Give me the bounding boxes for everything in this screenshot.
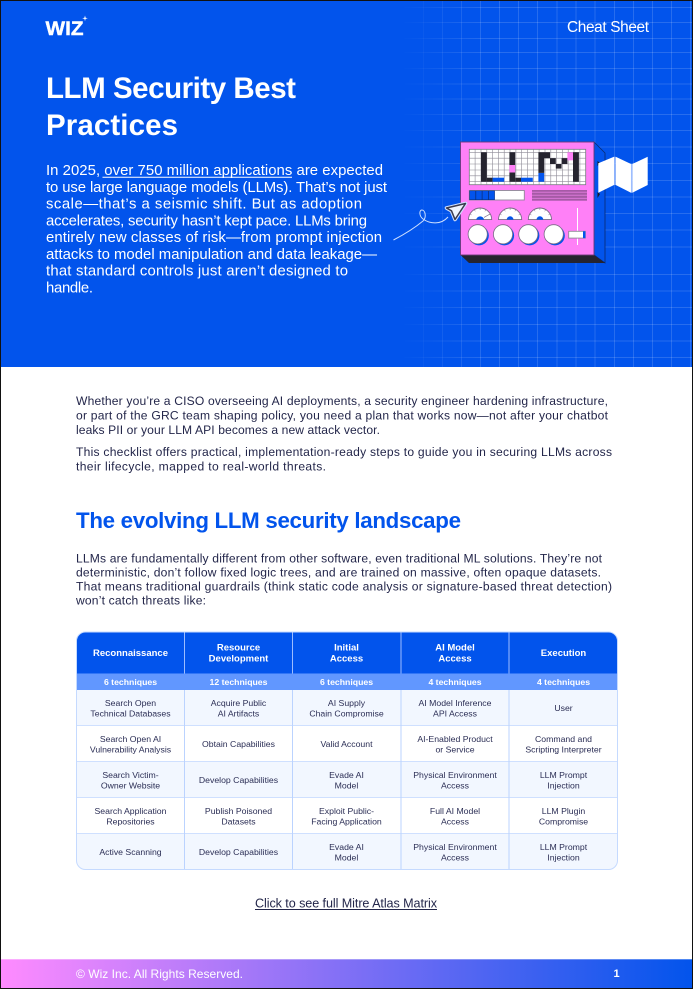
table row 1: AI Supply	[328, 698, 366, 708]
icon: folded map	[598, 157, 648, 193]
technique count row: 4 techniques	[537, 677, 590, 687]
table row 4	[95, 806, 588, 826]
table: MITRE ATLAS techniques	[76, 632, 618, 870]
footer bar: © Wiz Inc. All Rights Reserved.	[76, 967, 243, 981]
table row 4: Repositories	[106, 816, 155, 826]
intro text block: Whether you’re a CISO overseeing AI deployments, a security engineer hardening infrastructure,	[76, 394, 608, 408]
hero background panel	[0, 0, 693, 367]
table row 1: Search Open	[105, 698, 156, 708]
table row 3: Injection	[547, 780, 580, 790]
table row 3: Owner Website	[101, 780, 160, 790]
section paragraph: won’t catch threats like:	[75, 594, 206, 608]
striped readout	[532, 190, 587, 201]
table row 4: Facing Application	[311, 816, 382, 826]
table header row: Reconnaissance	[93, 648, 168, 659]
table row 2: AI-Enabled Product	[417, 734, 493, 744]
technique count row	[104, 677, 590, 687]
knobs	[468, 225, 565, 245]
hero intro paragraph: attacks to model manipulation and data leakage—	[46, 247, 377, 263]
slider	[569, 208, 585, 245]
table row 5: Access	[441, 852, 470, 862]
table row 4: LLM Plugin	[542, 806, 585, 816]
hero intro paragraph: that standard controls just aren’t designed to	[46, 264, 348, 280]
hero intro paragraph: scale—that’s a seismic shift. But as adoption	[46, 196, 362, 212]
table row 1: AI Artifacts	[218, 708, 260, 718]
table row 1: Acquire Public	[211, 698, 267, 708]
table header row: Access	[438, 654, 472, 664]
table row 4: Exploit Public-	[319, 806, 374, 816]
table row 4: Compromise	[539, 816, 588, 826]
table row 3: Evade AI	[329, 770, 364, 780]
intro text block: This checklist offers practical, implementation-ready steps to guide you in securing LLMs across	[76, 445, 612, 459]
table row 2: Command and	[535, 734, 592, 744]
table row 4: Access	[441, 816, 470, 826]
technique count row: 4 techniques	[428, 677, 482, 687]
technique count row: 6 techniques	[104, 677, 157, 687]
illustration: LLM control panel	[394, 142, 648, 263]
technique count row: 12 techniques	[210, 677, 268, 687]
intro text block: their lifecycle, mapped to real-world threats.	[76, 460, 326, 474]
title	[46, 72, 296, 142]
label: Cheat Sheet: Cheat Sheet	[567, 19, 650, 36]
intro text block: or part of the GRC team shaping policy, you need a plan that works now—not after your chatbot	[76, 408, 609, 422]
table row 3: LLM Prompt	[540, 770, 588, 780]
table row 4: Full AI Model	[430, 806, 480, 816]
gauges	[468, 208, 552, 220]
hero intro paragraph: handle.	[46, 280, 93, 296]
hero intro paragraph: accelerates, security hasn’t kept pace. LLMs bring	[46, 213, 367, 229]
table row 4: Publish Poisoned	[205, 806, 272, 816]
table row 5: Evade AI	[329, 842, 364, 852]
intro text block: leaks PII or your LLM API becomes a new attack vector.	[76, 423, 380, 437]
intro text block	[76, 394, 612, 474]
logo: WIZ: WIZ	[46, 18, 84, 40]
table row 3: Physical Environment	[413, 770, 497, 780]
table header row: Execution	[541, 648, 586, 659]
table row 1: API Access	[433, 708, 478, 718]
footer bar	[0, 959, 693, 988]
table row 3: Develop Capabilities	[199, 775, 279, 785]
panel side and base	[460, 142, 605, 263]
table row 5: Injection	[547, 852, 580, 862]
pixel screen reading LLM	[469, 149, 586, 185]
table row 5: Physical Environment	[413, 842, 497, 852]
table row 1: AI Model Inference	[419, 698, 492, 708]
table row 4: Datasets	[221, 816, 256, 826]
table row 5: LLM Prompt	[540, 842, 588, 852]
footer bar: 1	[614, 968, 620, 980]
link: full Mitre Atlas Matrix: Click to see full Mitre Atlas Matrix	[255, 896, 438, 910]
icon: pointer arrow	[446, 204, 466, 220]
hero intro paragraph: to use large language models (LLMs). That’s not just	[46, 180, 388, 196]
table row 3: Search Victim-	[102, 770, 159, 780]
section paragraph	[75, 552, 612, 608]
progress bar	[469, 190, 524, 200]
table header row: Resource	[217, 642, 260, 654]
table row 2: Search Open AI	[100, 734, 161, 744]
table row 5: Active Scanning	[99, 847, 162, 857]
hero intro paragraph: entirely new classes of risk—from prompt injection	[46, 230, 382, 246]
section paragraph: That means traditional guardrails (think static code analysis or signature-based threat detection)	[76, 580, 612, 594]
hero intro paragraph	[46, 163, 388, 296]
table row 5: Model	[335, 852, 358, 862]
table row 3	[101, 770, 588, 790]
hero intro paragraph: In 2025, over 750 million applications are expected	[46, 163, 383, 179]
table row 2: Vulnerability Analysis	[90, 744, 172, 754]
section paragraph: LLMs are fundamentally different from other software, even traditional ML solutions. They’re not	[76, 552, 603, 566]
technique count row: 6 techniques	[320, 677, 373, 687]
icon: curled cursor trail	[394, 210, 448, 240]
panel face	[460, 142, 594, 255]
heading: landscape section: The evolving LLM security landscape	[76, 508, 461, 533]
section paragraph: deterministic, don’t follow fixed logic trees, and are trained on massive, often opaque datasets.	[76, 566, 601, 580]
table row 2: or Service	[435, 744, 475, 754]
table row 1: Chain Compromise	[309, 708, 384, 718]
table row 2: Obtain Capabilities	[202, 739, 276, 749]
table header row: Development	[209, 654, 269, 664]
table row 1: Technical Databases	[90, 708, 171, 718]
title: LLM Security Best	[46, 72, 296, 105]
table header row: Access	[330, 654, 363, 664]
table row 5	[99, 842, 588, 862]
table header row: Initial	[334, 642, 359, 654]
table header row: AI Model	[435, 642, 475, 654]
title: Practices	[46, 109, 178, 142]
table row 2	[90, 734, 602, 754]
table row 1	[90, 698, 573, 718]
table row 3: Model	[335, 780, 358, 790]
table row 5: Develop Capabilities	[199, 847, 279, 857]
table header row	[93, 642, 586, 664]
table row 2: Valid Account	[320, 739, 373, 749]
table row 4: Search Application	[95, 806, 167, 816]
table row 2: Scripting Interpreter	[525, 744, 602, 754]
table row 3: Access	[441, 780, 470, 790]
table row 1: User	[554, 703, 573, 713]
